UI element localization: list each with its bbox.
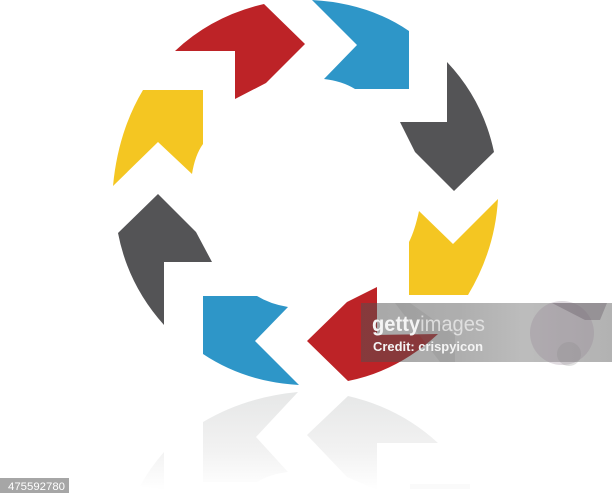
reflection: red arrow [307,396,438,490]
reflection: grey arrow [140,452,164,490]
id background [0,478,69,493]
reflection: blue arrow [203,392,298,482]
arrow: dark grey left [118,194,212,325]
arrow: yellow left [113,90,203,186]
circular arrow ring [113,0,498,385]
image id tag [0,478,69,493]
banner decorative circles [395,301,607,366]
arrow: blue bottom left [203,296,299,385]
arrow: red top [175,4,305,99]
credit line: Credit: crispyicon [373,340,483,354]
arrow: blue top right [312,0,409,89]
arrow: yellow right [409,199,498,295]
arrow: red bottom [307,287,438,381]
arrow: dark grey right [400,62,494,191]
watermark banner [361,301,612,366]
id number: 475592780 [8,481,65,493]
logo: gettyimages: gettyimages [372,313,485,336]
reflection: yellow hint [410,484,470,489]
reflection of arrows [140,392,470,490]
banner background [361,303,612,362]
